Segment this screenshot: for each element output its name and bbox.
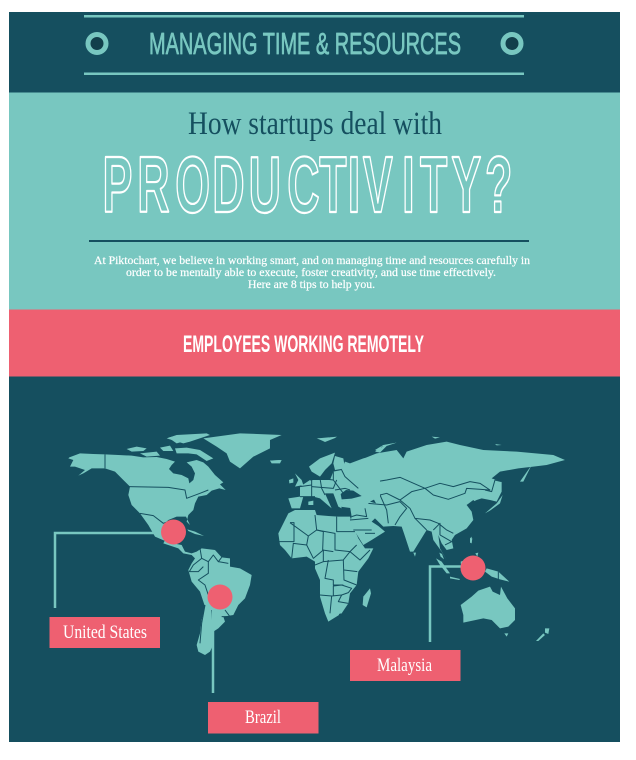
map: greenland and arctic [167, 433, 282, 468]
map: africa [278, 510, 373, 622]
intro paragraph [94, 255, 530, 291]
subtitle: How startups deal with [188, 106, 442, 142]
panel: map background [9, 376, 620, 742]
intro paragraph: order to be mentally able to execute, foster creativity, and use time effectively. [126, 267, 496, 279]
map: south america [163, 529, 252, 655]
callout: malaysia [350, 556, 486, 681]
title: productivity: PRODUCTIVITY? [102, 139, 512, 229]
panel: section heading band [9, 310, 620, 376]
callout: united states [50, 520, 186, 648]
heading: employees working remotely: EMPLOYEES WORKING REMOTELY [183, 331, 424, 358]
map: black sea [341, 490, 362, 499]
callout: malaysia: Malaysia [377, 655, 432, 676]
intro paragraph: At Piktochart, we believe in working smart, and on managing time and resources carefully in [94, 255, 530, 267]
callout: united states: United States [63, 622, 147, 643]
map: oceania and southeast asia [436, 538, 549, 641]
panel: intro [9, 92, 620, 310]
heading: managing time and resources: MANAGING TIME & RESOURCES [149, 26, 461, 61]
map: europe [270, 437, 397, 508]
callout: brazil: Brazil [245, 707, 281, 728]
panel: header band [9, 12, 620, 92]
world map [68, 433, 565, 655]
intro paragraph: Here are 8 tips to help you. [248, 279, 375, 291]
callout: brazil [208, 584, 318, 734]
map: north america [68, 436, 226, 542]
map: asia [317, 437, 565, 560]
